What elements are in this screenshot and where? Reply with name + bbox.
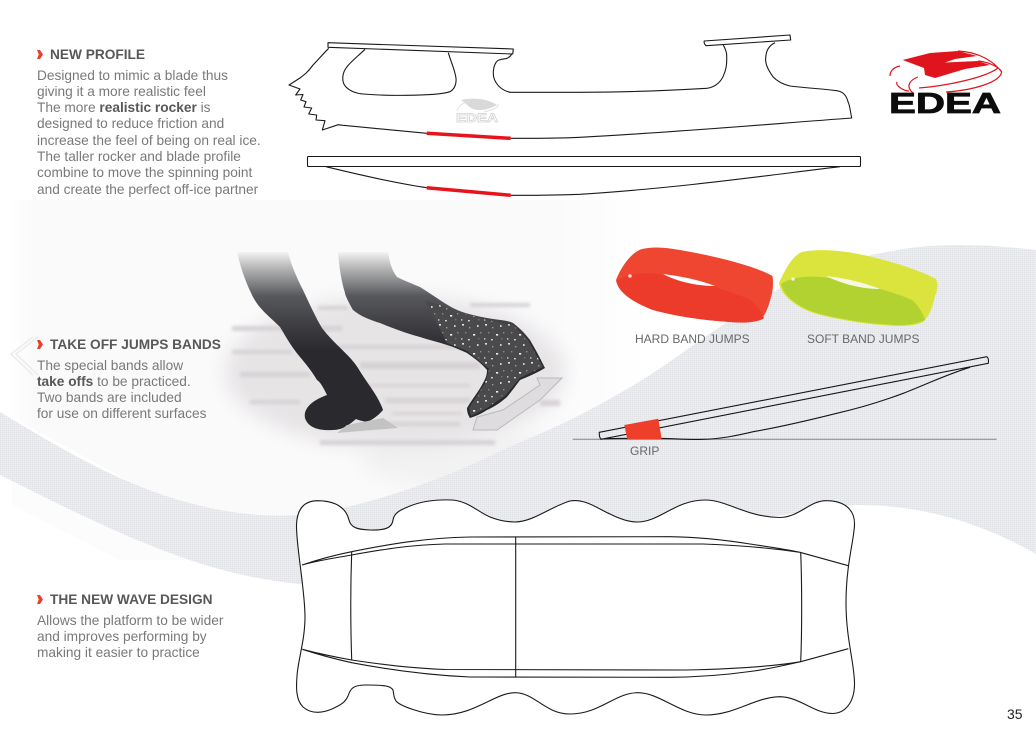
ice surface: [225, 296, 565, 448]
decorative chevron: [11, 337, 38, 375]
photo: skater legs on ice: [225, 252, 565, 448]
band pin: [628, 274, 632, 278]
EDEA logo: [889, 51, 1002, 120]
band inner face: [781, 277, 925, 325]
section: wave design text: and improves performing by: [37, 629, 207, 644]
section: new profile text: The taller rocker and blade profile: [37, 149, 241, 164]
band slit: [663, 274, 715, 286]
section: new profile text: The more realistic rocker is: [37, 100, 210, 115]
section: new profile text: Designed to mimic a blade thus: [37, 68, 228, 82]
page number: 35: [1007, 706, 1023, 722]
sequins on right leg: [425, 300, 543, 416]
background: grey swoosh: [0, 245, 1036, 584]
band body: [779, 250, 938, 326]
upper rails: [302, 537, 848, 566]
small logo on blade: [456, 99, 498, 125]
section: take off text: Two bands are included: [37, 390, 182, 405]
section: take off text: The special bands allow: [37, 358, 183, 372]
section: wave design text: making it easier to practice: [37, 645, 200, 660]
sequin shading on right leg: [425, 300, 543, 416]
hard band: [616, 247, 773, 323]
section: take off text: take offs to be practiced.: [37, 374, 191, 389]
rear plate: [704, 35, 791, 46]
wave platform drawing: [296, 500, 855, 715]
plate window: [343, 49, 456, 95]
front plate: [328, 43, 513, 54]
section: new profile text: [37, 68, 261, 197]
rocker highlight: [427, 188, 511, 195]
logo wordmark: EDEA: [889, 88, 1001, 120]
left blade: [337, 418, 398, 433]
section: take off heading: TAKE OFF JUMPS BANDS: [50, 337, 221, 352]
logo rings: [890, 51, 1002, 93]
section: take off text: for use on different surfaces: [37, 406, 206, 421]
bottom-view blade drawing: [308, 156, 860, 195]
label: soft band: SOFT BAND JUMPS: [807, 332, 919, 346]
label: grip: GRIP: [630, 444, 659, 458]
section: take off text: [37, 358, 206, 421]
bar and curve: [599, 357, 988, 439]
rocker highlight: [427, 133, 511, 138]
section: new profile text: designed to reduce friction and: [37, 116, 224, 131]
section: new profile text: increase the feel of being on real ice.: [37, 133, 261, 148]
section: new profile text: and create the perfect off-ice partner: [37, 182, 258, 197]
base bar: [308, 156, 860, 166]
small logo on blade: EDEA: [456, 113, 498, 125]
section: new profile text: combine to move the spinning point: [37, 165, 252, 180]
blade outline with toe pick: [289, 43, 852, 138]
tilted blade with grip: [599, 357, 988, 439]
lower rails: [302, 649, 848, 677]
band slit: [826, 276, 880, 289]
label: hard band: HARD BAND JUMPS: [635, 332, 750, 346]
platform outline: [296, 500, 855, 715]
cross lines: [351, 537, 802, 677]
right leg and boot: [338, 252, 545, 418]
section: new profile text: giving it a more realistic feel: [37, 84, 206, 99]
right blade: [473, 378, 562, 430]
side-view blade drawing: [289, 35, 852, 138]
ground line: [573, 438, 997, 440]
section: wave design text: Allows the platform to be wider: [37, 612, 223, 628]
section: wave design text: [37, 612, 224, 660]
logo swoosh: [903, 51, 990, 78]
band inner face: [617, 273, 764, 322]
section: new profile heading: NEW PROFILE: [50, 47, 145, 62]
soft band: [779, 250, 938, 326]
grip band: [624, 419, 662, 439]
section: wave design heading: THE NEW WAVE DESIGN: [50, 592, 212, 607]
background: pale dotted field: [8, 200, 648, 585]
band body: [616, 247, 773, 323]
rocker curve: [326, 167, 840, 195]
band pin: [791, 277, 795, 281]
left leg and boot: [237, 252, 383, 430]
